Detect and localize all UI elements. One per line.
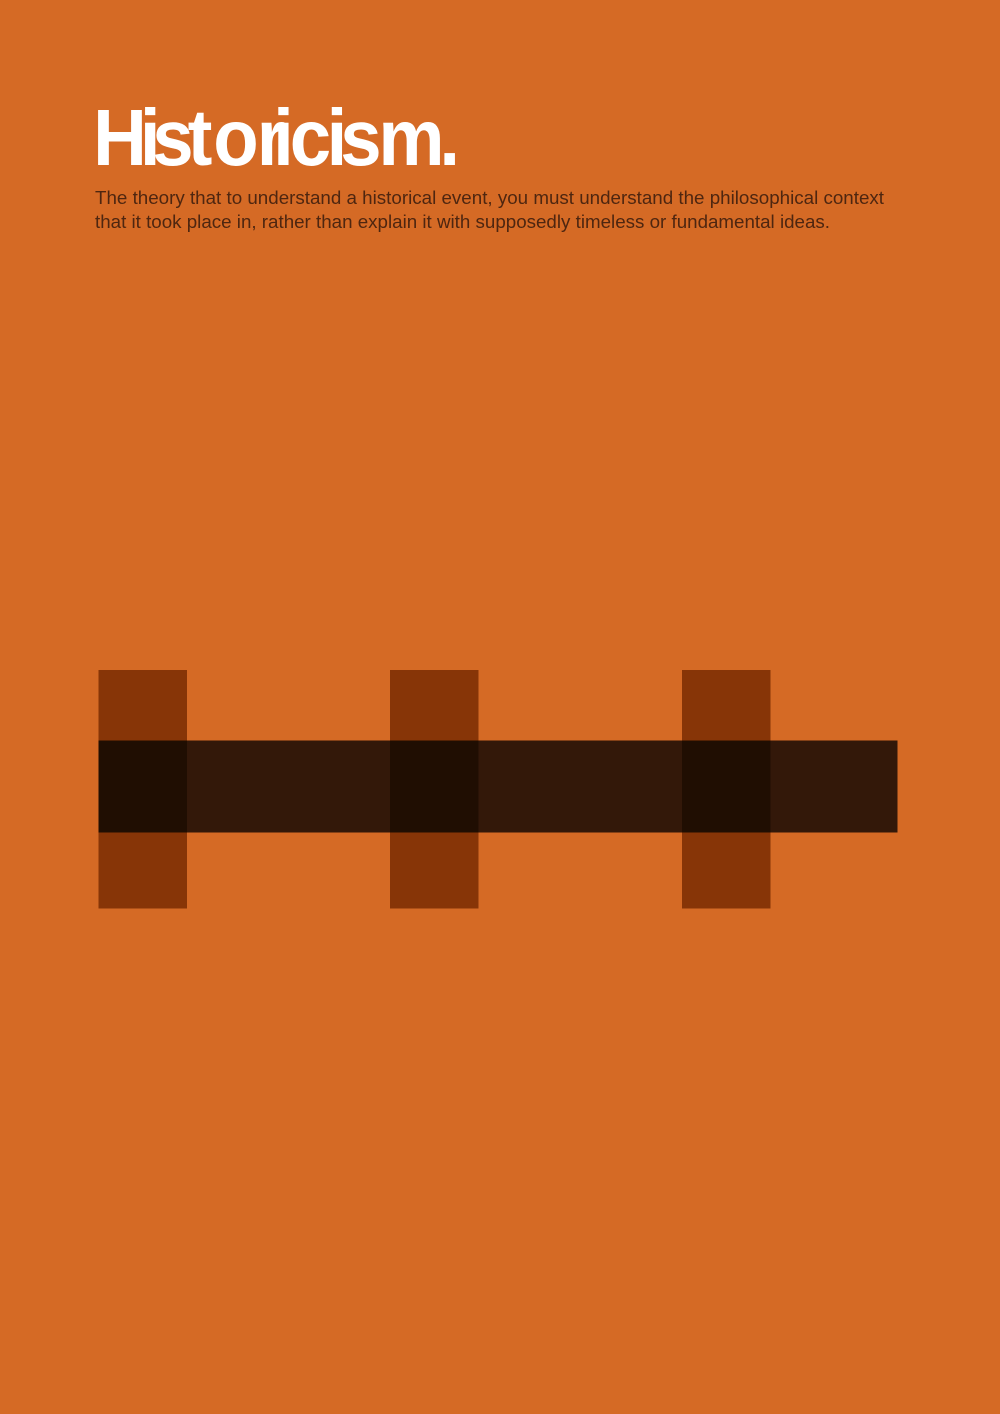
- vertical bar 2: [390, 670, 478, 908]
- overlap 2: [390, 740, 478, 832]
- overlap 1: [98, 740, 187, 832]
- description text: that it took place in, rather than explain it with supposedly timeless or fundamental ideas.: [95, 212, 830, 232]
- description text: [95, 188, 884, 232]
- overlap 3: [682, 740, 770, 832]
- description text: The theory that to understand a historical event, you must understand the philosophical context: [95, 188, 884, 208]
- horizontal band: [98, 740, 898, 832]
- vertical bar 3: [682, 670, 770, 908]
- diagram: three vertical bars crossed by a horizontal band: [98, 670, 898, 908]
- title: Historicism.: [93, 94, 460, 183]
- vertical bar 1: [98, 670, 187, 908]
